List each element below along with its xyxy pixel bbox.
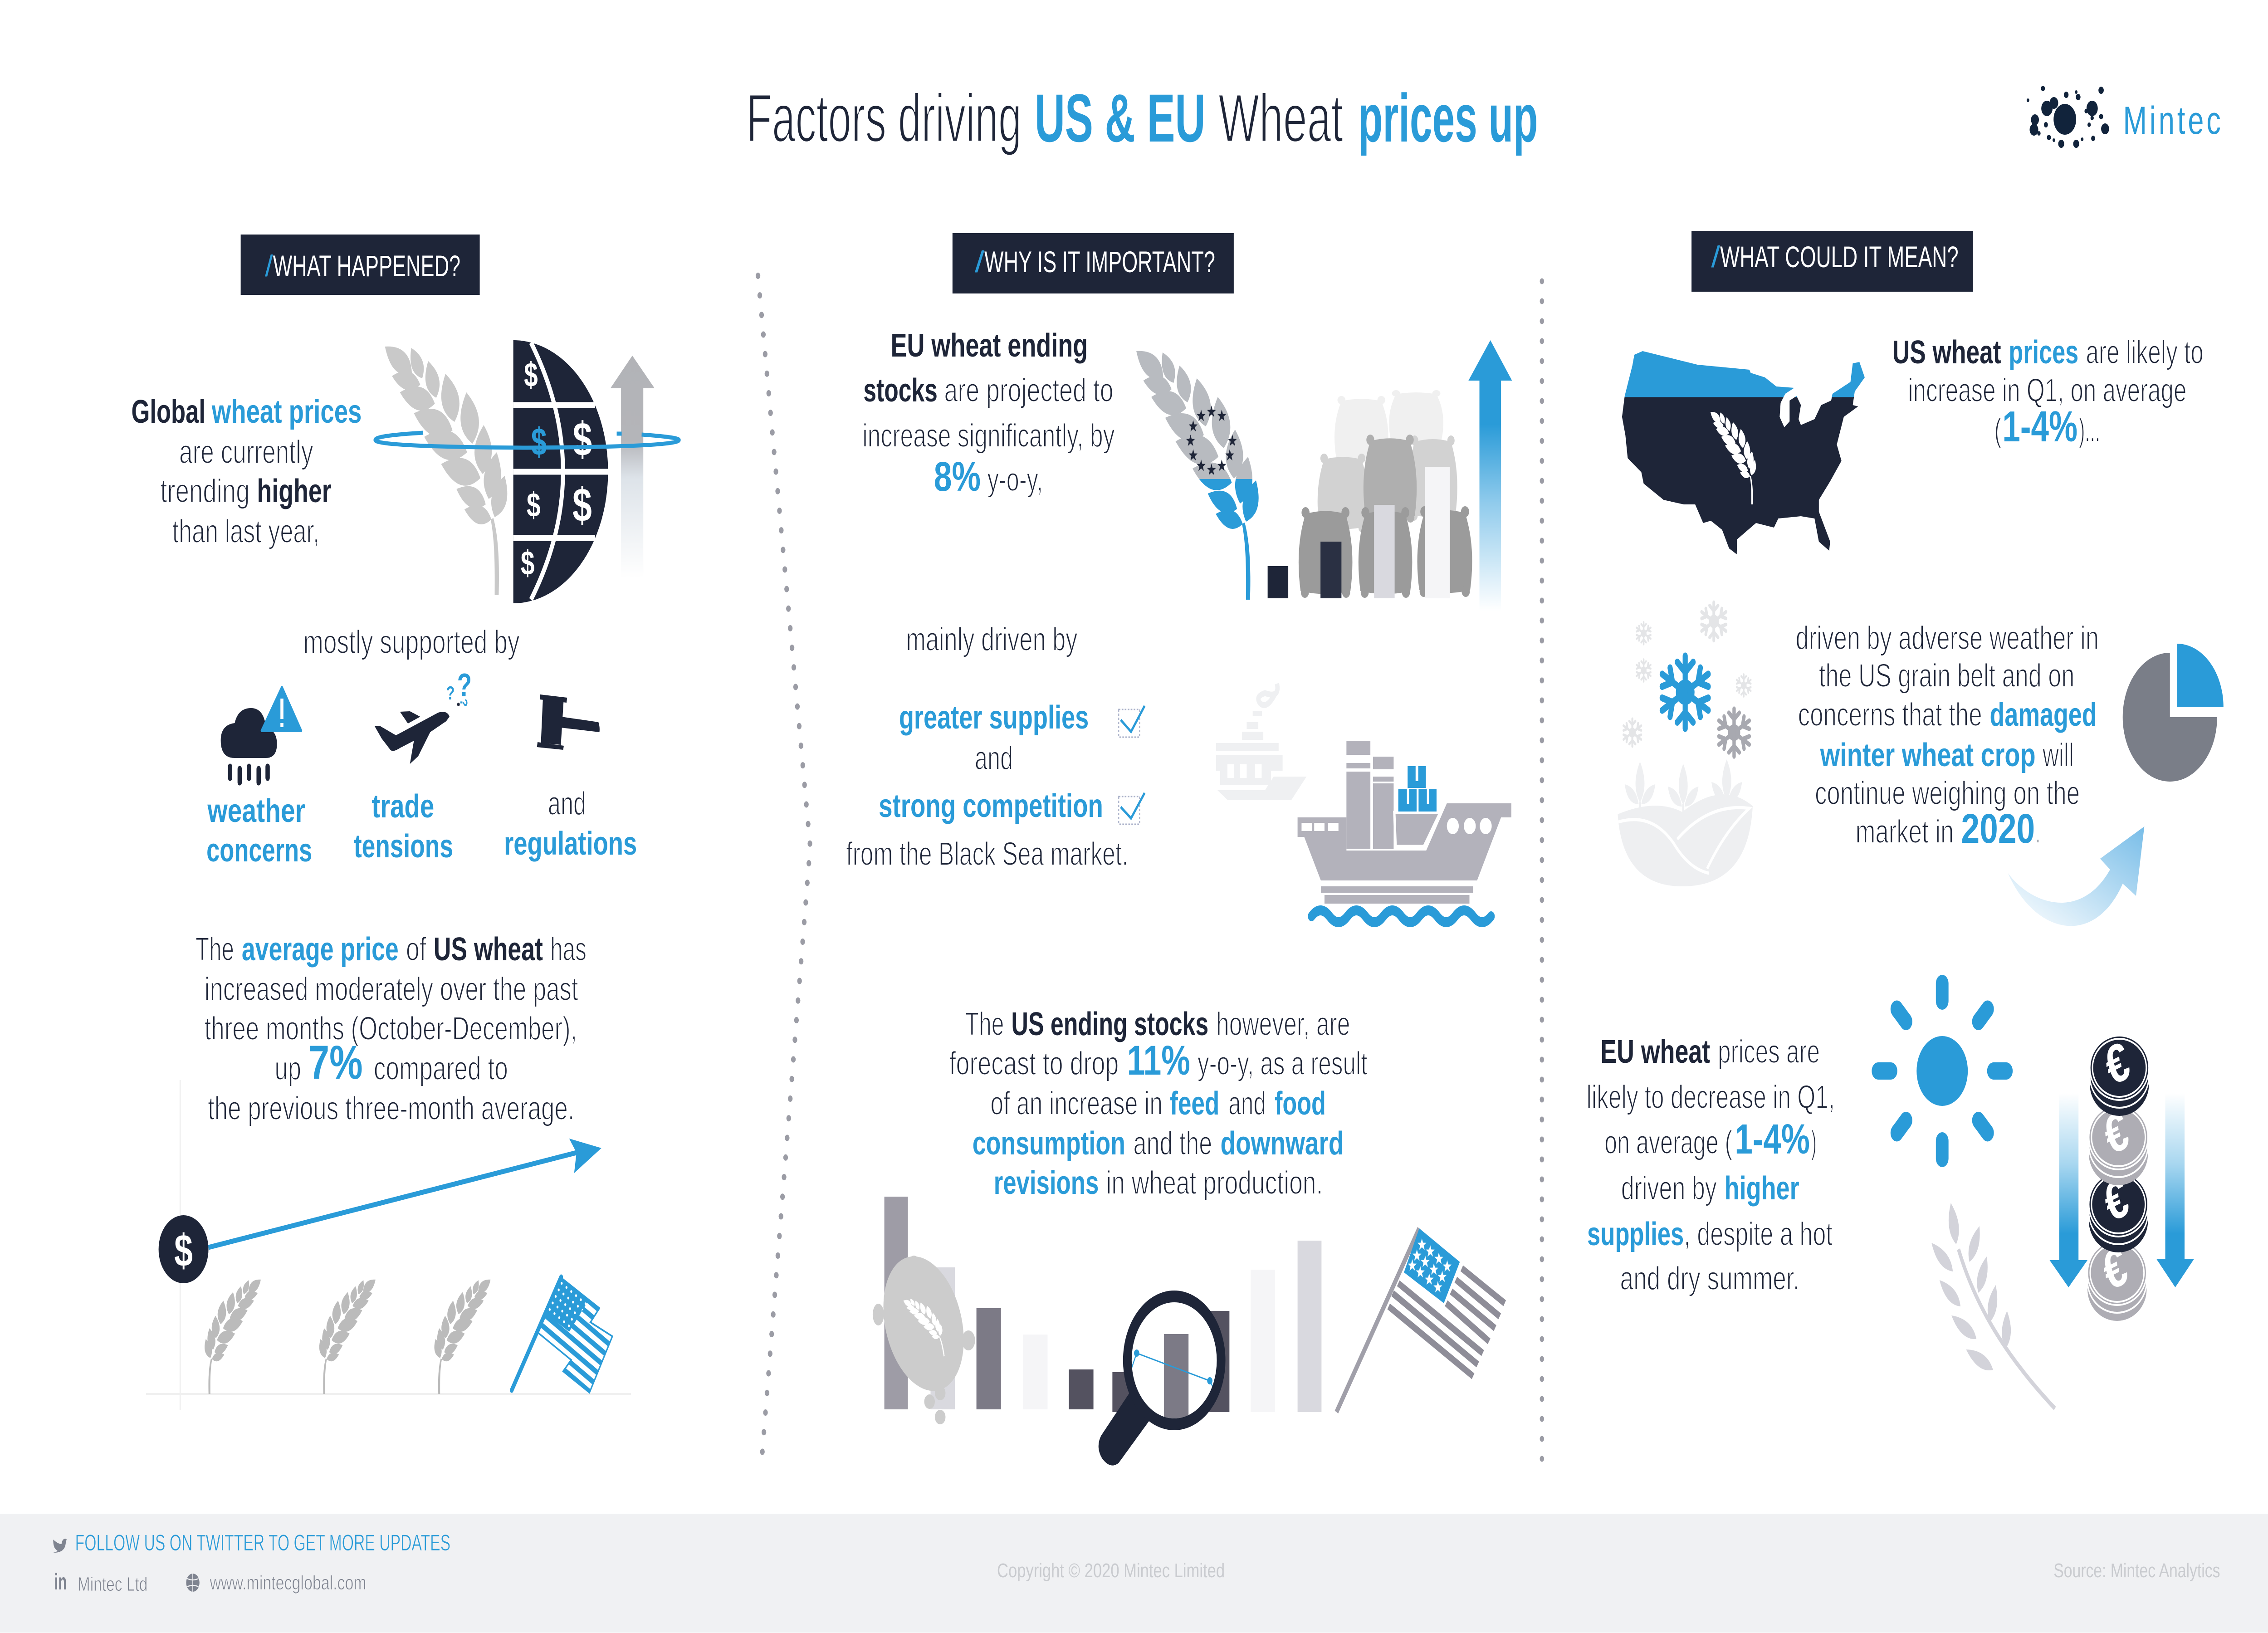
text: EU wheat ending stocks bbox=[862, 328, 1115, 500]
text: greater supplies and strong competition bbox=[846, 699, 1129, 872]
icon: euro coin stack bbox=[2087, 1030, 2149, 1321]
text: EU wheat ending stocks: 8% bbox=[934, 454, 981, 500]
icon: US flag blue bbox=[512, 1277, 612, 1393]
icon: wheat grey curved bbox=[1931, 1203, 2055, 1408]
text: US ending stocks: consumption bbox=[973, 1125, 1125, 1162]
icon: euro coin stack: € bbox=[2097, 1235, 2133, 1302]
text: driven by adverse weather: . bbox=[2036, 814, 2039, 850]
text: EU wheat prices: higher bbox=[1725, 1170, 1799, 1207]
text: EU wheat prices: EU wheat bbox=[1600, 1034, 1710, 1070]
icon: euro coin stack: € bbox=[2098, 1100, 2134, 1167]
text: EU wheat prices: , despite a hot bbox=[1684, 1216, 1833, 1252]
icon: sun bbox=[1878, 983, 2006, 1159]
icon: snowflakes bbox=[1622, 602, 1752, 757]
text: EU wheat prices: prices are bbox=[1718, 1034, 1820, 1070]
logo: Mintec bbox=[2027, 86, 2221, 148]
text: EU wheat ending stocks: EU wheat ending bbox=[891, 328, 1088, 364]
text: US wheat prices: prices bbox=[2009, 334, 2078, 371]
icon: dollar coin: $ bbox=[174, 1225, 193, 1276]
icon: US map with wheat bbox=[1622, 351, 1865, 554]
panel: what could it mean bbox=[1587, 231, 2224, 1408]
text: average price of US wheat: The bbox=[196, 931, 234, 968]
text: US ending stocks: and bbox=[1228, 1085, 1266, 1122]
text: greater supplies and strong competition: strong competition bbox=[879, 788, 1103, 824]
arrow: right down bbox=[2156, 1093, 2194, 1287]
icon: US flag grey bbox=[1336, 1228, 1505, 1412]
text: EU wheat prices: and dry summer. bbox=[1620, 1261, 1799, 1297]
text: driven by adverse weather: the US grain belt and on bbox=[1819, 658, 2074, 694]
heading: what happened: / bbox=[265, 250, 274, 283]
text: EU wheat prices: ) bbox=[1811, 1125, 1817, 1161]
arrow: blue up bbox=[1468, 340, 1512, 611]
text: global wheat prices: trending bbox=[160, 473, 249, 509]
text: EU wheat ending stocks: are projected to bbox=[944, 372, 1114, 409]
text: US wheat prices: are likely to bbox=[2086, 334, 2204, 371]
text: follow us on twitter: FOLLOW US ON TWITTER TO GET MORE UPDATES bbox=[75, 1530, 450, 1555]
text: mostly supported by: mostly supported by bbox=[303, 624, 520, 660]
text: driven by adverse weather: driven by adverse weather in bbox=[1796, 620, 2099, 656]
text: US ending stocks: feed bbox=[1170, 1085, 1219, 1122]
logo: Mintec: Mintec bbox=[2123, 98, 2221, 142]
icon: checkbox two bbox=[1119, 793, 1144, 824]
title: US & EU bbox=[1035, 80, 1206, 156]
text: EU wheat ending stocks: increase significantly, by bbox=[862, 418, 1115, 454]
text: greater supplies and strong competition: and bbox=[975, 740, 1013, 777]
title: Wheat bbox=[1218, 80, 1343, 156]
text: US wheat prices: 1-4% bbox=[2002, 402, 2077, 451]
panel: what happened bbox=[132, 235, 679, 1410]
icon: wheat and dollar globe with rising arrow: $ bbox=[521, 544, 534, 582]
text: average price of US wheat: the previous three-month average. bbox=[208, 1090, 574, 1127]
text: global wheat prices: than last year, bbox=[172, 513, 319, 550]
title bbox=[746, 80, 1538, 156]
icon: plane with question marks bbox=[375, 667, 472, 764]
text: US wheat prices bbox=[1892, 334, 2204, 451]
icon: wheat and dollar globe with rising arrow bbox=[375, 340, 679, 603]
text: copyright: Copyright © 2020 Mintec Limited bbox=[997, 1560, 1225, 1582]
text: source: Source: Mintec Analytics bbox=[2053, 1560, 2220, 1582]
text: US ending stocks: revisions bbox=[994, 1165, 1099, 1201]
text: EU wheat ending stocks: stocks bbox=[863, 372, 938, 409]
icon: farm field bbox=[1618, 759, 1753, 886]
text: greater supplies and strong competition: from the Black Sea market. bbox=[846, 836, 1129, 872]
text: average price of US wheat: average price bbox=[242, 931, 399, 968]
chart: pie bbox=[2123, 644, 2224, 782]
text: EU wheat ending stocks: y-o-y, bbox=[987, 462, 1043, 498]
text: EU wheat prices: on average ( bbox=[1604, 1125, 1732, 1161]
text: US wheat prices: ( bbox=[1994, 412, 2001, 449]
text: US ending stocks: The bbox=[965, 1006, 1004, 1042]
icon: euro coin stack: € bbox=[2099, 1030, 2135, 1097]
heading: why is it important: WHY IS IT IMPORTANT? bbox=[984, 246, 1215, 279]
icon: checkbox one bbox=[1119, 706, 1144, 737]
label: trade tensions bbox=[354, 788, 453, 865]
text: global wheat prices bbox=[132, 394, 362, 550]
icon: wheat and dollar globe with rising arrow: $ bbox=[524, 356, 538, 394]
text: US ending stocks: 11% bbox=[1127, 1037, 1190, 1084]
text: EU wheat prices: 1-4% bbox=[1735, 1116, 1810, 1163]
text: US ending stocks: forecast to drop bbox=[949, 1046, 1119, 1082]
label: and regulations: and bbox=[548, 786, 586, 822]
label: and regulations: regulations bbox=[504, 826, 637, 862]
icon: linkedin: in bbox=[54, 1569, 67, 1594]
text: global wheat prices: are currently bbox=[179, 434, 313, 470]
text: average price of US wheat: compared to bbox=[374, 1051, 508, 1087]
icon: magnifying glass bbox=[1099, 1296, 1221, 1466]
icon: weather warning cloud bbox=[221, 687, 301, 782]
heading: what could it mean bbox=[1691, 231, 1973, 292]
icon: tilted wheat sack bbox=[868, 1238, 979, 1424]
title: prices up bbox=[1358, 80, 1538, 156]
icon: wheat and dollar globe with rising arrow: $ bbox=[531, 420, 547, 463]
text: US ending stocks: of an increase in bbox=[990, 1085, 1163, 1122]
heading: what happened: WHAT HAPPENED? bbox=[273, 250, 460, 283]
text: average price of US wheat: US wheat bbox=[434, 931, 543, 968]
text: driven by adverse weather: market in bbox=[1855, 814, 1954, 850]
heading: what could it mean: / bbox=[1711, 241, 1721, 274]
icon: twitter bird bbox=[53, 1539, 67, 1553]
text: US ending stocks bbox=[949, 1006, 1368, 1201]
text: average price of US wheat: of bbox=[406, 931, 426, 968]
heading: why is it important bbox=[953, 233, 1234, 293]
text: driven by adverse weather: will bbox=[2042, 737, 2074, 773]
text: US ending stocks: however, are bbox=[1216, 1006, 1350, 1042]
text: EU wheat prices: supplies bbox=[1587, 1216, 1684, 1252]
text: driven by adverse weather: winter wheat crop bbox=[1820, 737, 2036, 773]
icon: wheat and dollar globe with rising arrow: $ bbox=[527, 486, 541, 524]
chart: US wheat price trend arrow bbox=[146, 1080, 631, 1410]
text: mainly driven by: mainly driven by bbox=[906, 621, 1078, 658]
icon: gavel bbox=[537, 694, 600, 750]
icon: plane with question marks: ? bbox=[457, 667, 472, 704]
text: EU wheat prices bbox=[1587, 1034, 1835, 1297]
icons: three wheat stalks bbox=[205, 1280, 490, 1394]
text: average price of US wheat: increased moderately over the past bbox=[205, 971, 578, 1007]
chart: US stocks bars bbox=[885, 1197, 1321, 1412]
text: US ending stocks: downward bbox=[1221, 1125, 1344, 1162]
label: weather concerns bbox=[206, 793, 312, 869]
text: US ending stocks: and the bbox=[1134, 1125, 1212, 1162]
label: and regulations bbox=[504, 786, 637, 862]
panel: why is it important bbox=[846, 233, 1512, 1466]
text: US ending stocks: in wheat production. bbox=[1106, 1165, 1323, 1201]
text: website: www.mintecglobal.com bbox=[210, 1572, 367, 1594]
title: Factors driving bbox=[746, 80, 1022, 156]
text: average price of US wheat bbox=[196, 931, 587, 1127]
text: global wheat prices: wheat prices bbox=[211, 394, 362, 430]
heading: what happened bbox=[241, 235, 480, 295]
icon: dollar coin bbox=[159, 1215, 209, 1283]
text: US wheat prices: )... bbox=[2079, 412, 2100, 449]
heading: why is it important: / bbox=[975, 246, 985, 279]
icon: wheat and dollar globe with rising arrow: $ bbox=[573, 412, 592, 466]
text: global wheat prices: Global bbox=[132, 394, 205, 430]
text: average price of US wheat: up bbox=[274, 1051, 301, 1087]
icon: cargo ship bbox=[1298, 741, 1511, 922]
text: greater supplies and strong competition: greater supplies bbox=[899, 699, 1089, 736]
label: trade tensions: tensions bbox=[354, 828, 453, 865]
label: weather concerns: concerns bbox=[206, 832, 312, 869]
text: average price of US wheat: has bbox=[550, 931, 587, 968]
text: US ending stocks: y-o-y, as a result bbox=[1198, 1046, 1368, 1082]
icon: euro coin stack: € bbox=[2098, 1167, 2134, 1234]
icon: plane with question marks: ? bbox=[458, 699, 469, 707]
icon: ghost ship bbox=[1216, 684, 1306, 800]
icon: EU wheat with stars bbox=[1136, 351, 1259, 600]
text: average price of US wheat: 7% bbox=[308, 1036, 363, 1089]
text: average price of US wheat: three months (October-December), bbox=[205, 1011, 577, 1047]
text: driven by adverse weather: continue weighing on the bbox=[1815, 775, 2080, 812]
text: US ending stocks: food bbox=[1275, 1085, 1326, 1122]
text: driven by adverse weather: 2020 bbox=[1961, 806, 2035, 852]
label: trade tensions: trade bbox=[371, 788, 434, 825]
text: EU wheat prices: likely to decrease in Q1, bbox=[1587, 1079, 1835, 1115]
chart: sacks and rising bars bbox=[1268, 390, 1472, 598]
footer bbox=[0, 1514, 2268, 1633]
text: Mintec Ltd: Mintec Ltd bbox=[78, 1573, 147, 1595]
text: EU wheat prices: driven by bbox=[1621, 1170, 1717, 1207]
text: driven by adverse weather bbox=[1796, 620, 2099, 852]
arrow: curved up bbox=[2008, 826, 2144, 926]
text: US wheat prices: increase in Q1, on average bbox=[1908, 372, 2186, 409]
text: global wheat prices: higher bbox=[257, 473, 332, 509]
icon: web globe bbox=[186, 1574, 200, 1592]
text: US wheat prices: US wheat bbox=[1892, 334, 2001, 371]
icon: wheat and dollar globe with rising arrow: $ bbox=[572, 478, 592, 532]
heading: what could it mean: WHAT COULD IT MEAN? bbox=[1720, 241, 1959, 274]
label: weather concerns: weather bbox=[207, 793, 305, 829]
text: driven by adverse weather: concerns that the bbox=[1798, 697, 1982, 733]
arrow: left down bbox=[2049, 1093, 2087, 1287]
icon: plane with question marks: ? bbox=[446, 682, 455, 704]
text: driven by adverse weather: damaged bbox=[1990, 697, 2097, 733]
text: US ending stocks: US ending stocks bbox=[1012, 1006, 1208, 1042]
